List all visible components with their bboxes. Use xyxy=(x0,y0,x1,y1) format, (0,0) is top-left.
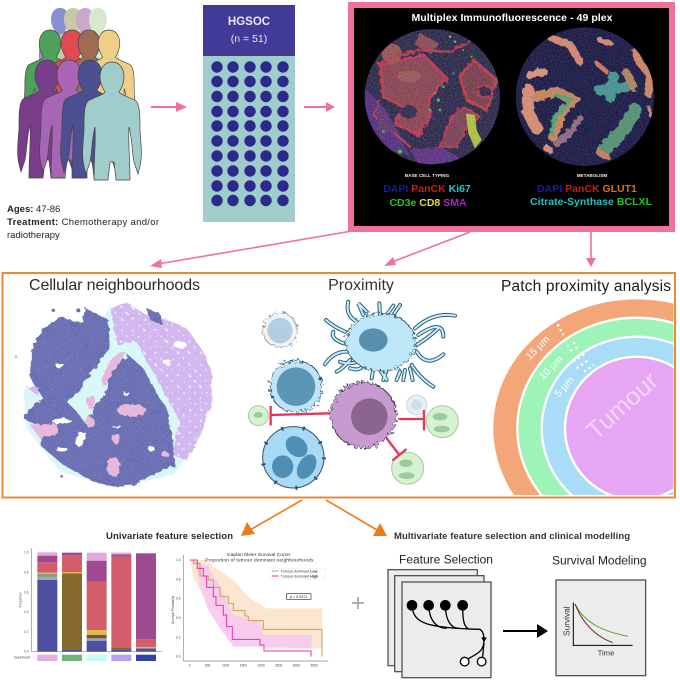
network diagram xyxy=(407,600,487,666)
label: tumour: Tumour xyxy=(581,367,664,445)
stacked cards xyxy=(388,570,491,678)
legend: Tumour dominant High xyxy=(281,574,318,578)
chart: Kaplan Meier: 0.2 xyxy=(176,635,181,639)
chart: Kaplan Meier: Survival Probability xyxy=(171,595,175,624)
survival curves: Time xyxy=(598,649,614,658)
p value xyxy=(287,594,311,599)
chart title xyxy=(205,552,314,564)
panel: HGSOC cohort xyxy=(203,5,295,222)
arrow: cohort to imaging xyxy=(304,102,335,112)
distance markers xyxy=(558,324,594,372)
chart: Kaplan Meier: 0.6 xyxy=(176,597,181,601)
chart: Kaplan Meier: 0.4 xyxy=(176,616,181,620)
chart: Kaplan Meier: 1500 xyxy=(240,664,247,668)
text: patient details xyxy=(7,204,159,241)
panel: survival modelling xyxy=(552,553,647,676)
chart: Kaplan Meier xyxy=(171,552,328,668)
cell: T cell xyxy=(270,361,322,413)
confidence bands xyxy=(190,560,322,648)
survival curves xyxy=(561,603,633,658)
panel: feature selection: Feature Selection xyxy=(399,552,493,566)
legend: metabolism: DAPI PanCK GLUT1 xyxy=(537,183,637,195)
cell: macrophage xyxy=(325,302,455,387)
axes: 0.4 xyxy=(24,610,29,614)
heading: univariate: Univariate feature selection xyxy=(106,531,233,542)
legend: base cell typing: BASE CELL TYPING xyxy=(405,173,450,178)
text: patient details: Treatment: Chemotherapy and/or xyxy=(7,217,159,228)
legend: base cell typing: CD3e CD8 SMA xyxy=(389,197,467,209)
heading: patch proximity analysis: Patch proximity analysis xyxy=(501,278,671,295)
panel: multiplex immunofluorescence xyxy=(351,5,672,229)
panel: HGSOC cohort: HGSOC xyxy=(228,16,270,28)
chart: stacked bars xyxy=(14,548,162,661)
arrow: patients to cohort xyxy=(151,102,187,112)
chart: Kaplan Meier: 1.0 xyxy=(176,558,181,562)
distance labels xyxy=(524,334,577,400)
panel: feature selection xyxy=(388,552,493,678)
axes: 0.0 xyxy=(24,650,29,654)
region: tumour blue xyxy=(23,308,175,487)
inhibition arrows xyxy=(271,406,424,461)
text: patient details: Ages: 47-86 xyxy=(7,204,60,215)
distance labels: 10 µm xyxy=(537,354,566,382)
neighbourhood colour key xyxy=(14,655,156,661)
p value: p = 0.0371 xyxy=(290,595,307,599)
axes: 0.2 xyxy=(24,630,29,634)
diagram: patch proximity rings xyxy=(493,299,674,495)
image: metabolism core xyxy=(513,23,657,170)
panel: survival modelling: Survival Modeling xyxy=(552,553,647,567)
curves xyxy=(190,560,322,657)
chart: Kaplan Meier: 3000 xyxy=(293,664,300,668)
arrows: imaging to analyses xyxy=(150,231,596,268)
axes: 1.0 xyxy=(24,551,29,555)
chart: neighbourhood map xyxy=(15,302,213,488)
chart title: Kaplan Meier Survival Curve: xyxy=(227,552,291,558)
region: lavender xyxy=(110,302,212,460)
neighbourhood colour key: bourhood xyxy=(14,656,30,660)
cell: pale lymphocyte xyxy=(263,313,297,347)
legend: metabolism xyxy=(530,173,653,208)
cell: pale blue xyxy=(407,395,427,415)
heading: multivariate: Multivariate feature selection and clinical modelling xyxy=(394,531,630,542)
sample dots xyxy=(211,61,289,206)
legend: base cell typing xyxy=(383,173,471,209)
heading: cellular neighbourhoods: Cellular neighbourhoods xyxy=(29,277,200,294)
legend: Tumour dominant Low xyxy=(281,569,318,573)
text: patient details: radiotherapy xyxy=(7,230,60,241)
legend: base cell typing: DAPI PanCK Ki67 xyxy=(383,183,471,195)
diagram: cell proximity xyxy=(248,302,458,488)
chart: Kaplan Meier: 1000 xyxy=(222,664,229,668)
axes: 0.6 xyxy=(24,590,29,594)
icon: patient silhouettes xyxy=(18,8,141,180)
chart: Kaplan Meier: 500 xyxy=(205,664,211,668)
axes xyxy=(19,548,162,654)
chart: Kaplan Meier: 0.0 xyxy=(176,655,181,659)
chart title: Proportion of tumour dominant neighbourhoods xyxy=(205,558,314,564)
distance labels: 5 µm xyxy=(553,375,577,400)
chart: Kaplan Meier: 2500 xyxy=(275,664,282,668)
region: stroma pink xyxy=(27,350,169,477)
survival curves: Survival xyxy=(561,606,571,636)
icon: plus xyxy=(352,597,364,609)
image: base cell typing core xyxy=(364,29,500,164)
gaps xyxy=(52,342,187,452)
distance labels: 15 µm xyxy=(524,334,552,362)
cell: tumour cell xyxy=(331,382,396,448)
axes xyxy=(183,555,328,661)
chart: Kaplan Meier: 2000 xyxy=(257,664,265,668)
chart: Kaplan Meier: 3500 xyxy=(310,664,318,668)
axes: 0.8 xyxy=(24,571,29,575)
legend: metabolism: METABOLISM xyxy=(577,173,607,178)
chart: Kaplan Meier: 0 xyxy=(189,664,191,668)
arrows: analyses to feature selection xyxy=(241,500,387,536)
chart: Kaplan Meier: 0.8 xyxy=(176,577,181,581)
heading: multiplex: Multiplex Immunofluorescence - 49 plex xyxy=(412,12,613,24)
legend xyxy=(270,568,325,579)
cell: neutrophil xyxy=(263,427,324,488)
arrow: to survival modelling xyxy=(503,624,548,638)
cells: inhibited green xyxy=(248,406,458,484)
panel: analyses frame xyxy=(2,273,675,498)
heading: proximity: Proximity xyxy=(328,277,394,294)
panel: HGSOC cohort: (n = 51) xyxy=(231,33,267,45)
legend: metabolism: Citrate-Synthase BCLXL xyxy=(530,196,653,208)
axes: Proportion xyxy=(19,592,23,607)
